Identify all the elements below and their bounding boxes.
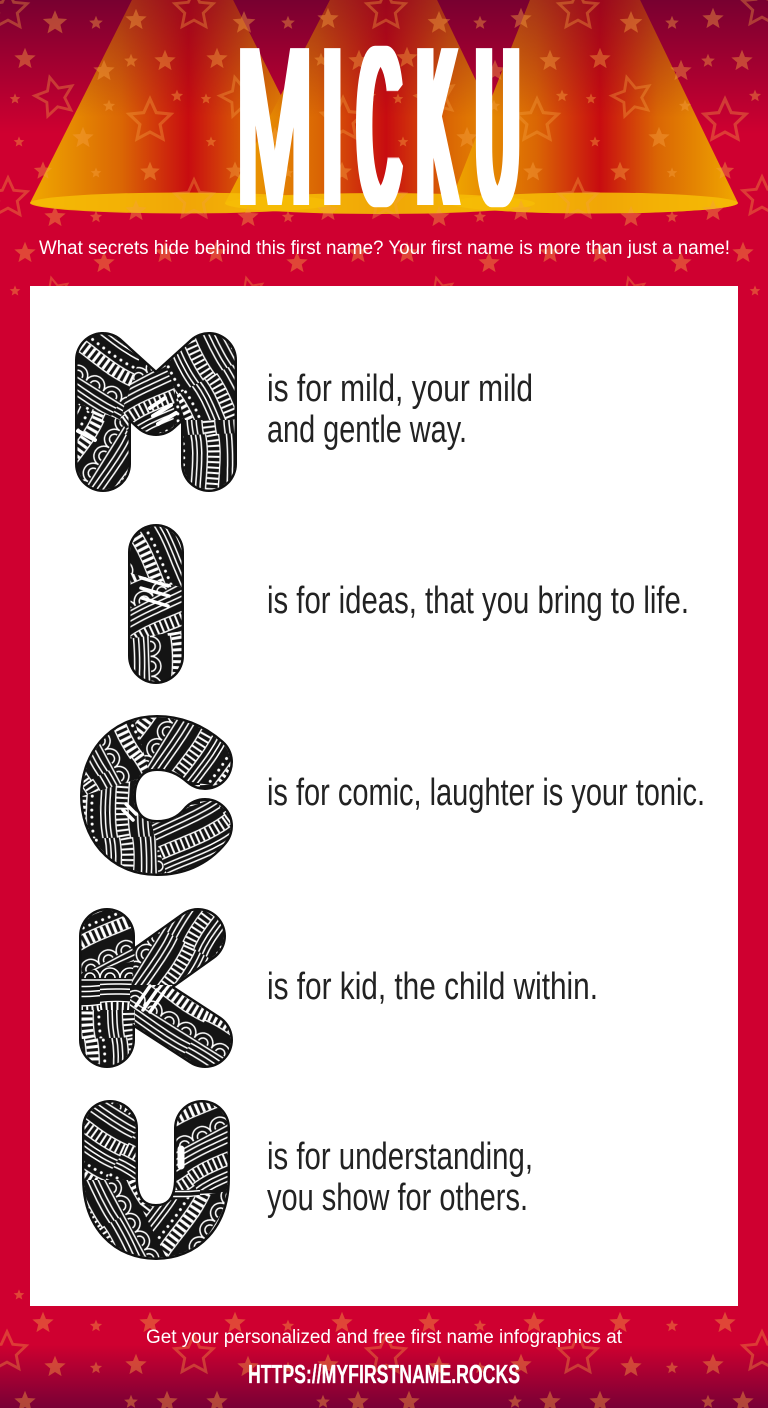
text: K line: is for kid, the child within. — [267, 966, 598, 1008]
icon: letter C — [108, 743, 205, 848]
title: U — [477, 1, 518, 254]
row: K — [107, 936, 598, 1040]
text: U line: is for understanding, — [267, 1136, 533, 1178]
row: M — [78, 360, 533, 464]
spotlights — [30, 0, 738, 214]
title: C — [359, 1, 400, 254]
text: M line: is for mild, your mild — [267, 368, 533, 410]
white content panel — [30, 286, 738, 1306]
title: M — [237, 0, 313, 254]
row: I — [141, 552, 689, 656]
icon: letter K — [107, 936, 205, 1040]
icon: letter I — [141, 552, 169, 656]
spotlight: left — [30, 0, 335, 213]
row: C — [108, 743, 705, 848]
text: U line: you show for others. — [267, 1177, 528, 1219]
spotlight: right — [450, 0, 738, 214]
text: M line: and gentle way. — [267, 409, 467, 451]
spotlight floor pool — [30, 192, 738, 214]
title: I — [324, 1, 340, 254]
row: U — [110, 1128, 533, 1232]
title — [237, 0, 518, 254]
footer text: Get your personalized and free first name infographics at — [146, 1327, 623, 1348]
title: K — [418, 1, 456, 254]
footer url: HTTPS://MYFIRSTNAME.ROCKS — [248, 1359, 520, 1389]
subtitle: What secrets hide behind this first name? Your first name is more than just a name! — [39, 238, 730, 259]
icon: letter M — [78, 360, 209, 464]
spotlight: centre — [225, 0, 535, 214]
icon: letter U — [110, 1128, 202, 1232]
